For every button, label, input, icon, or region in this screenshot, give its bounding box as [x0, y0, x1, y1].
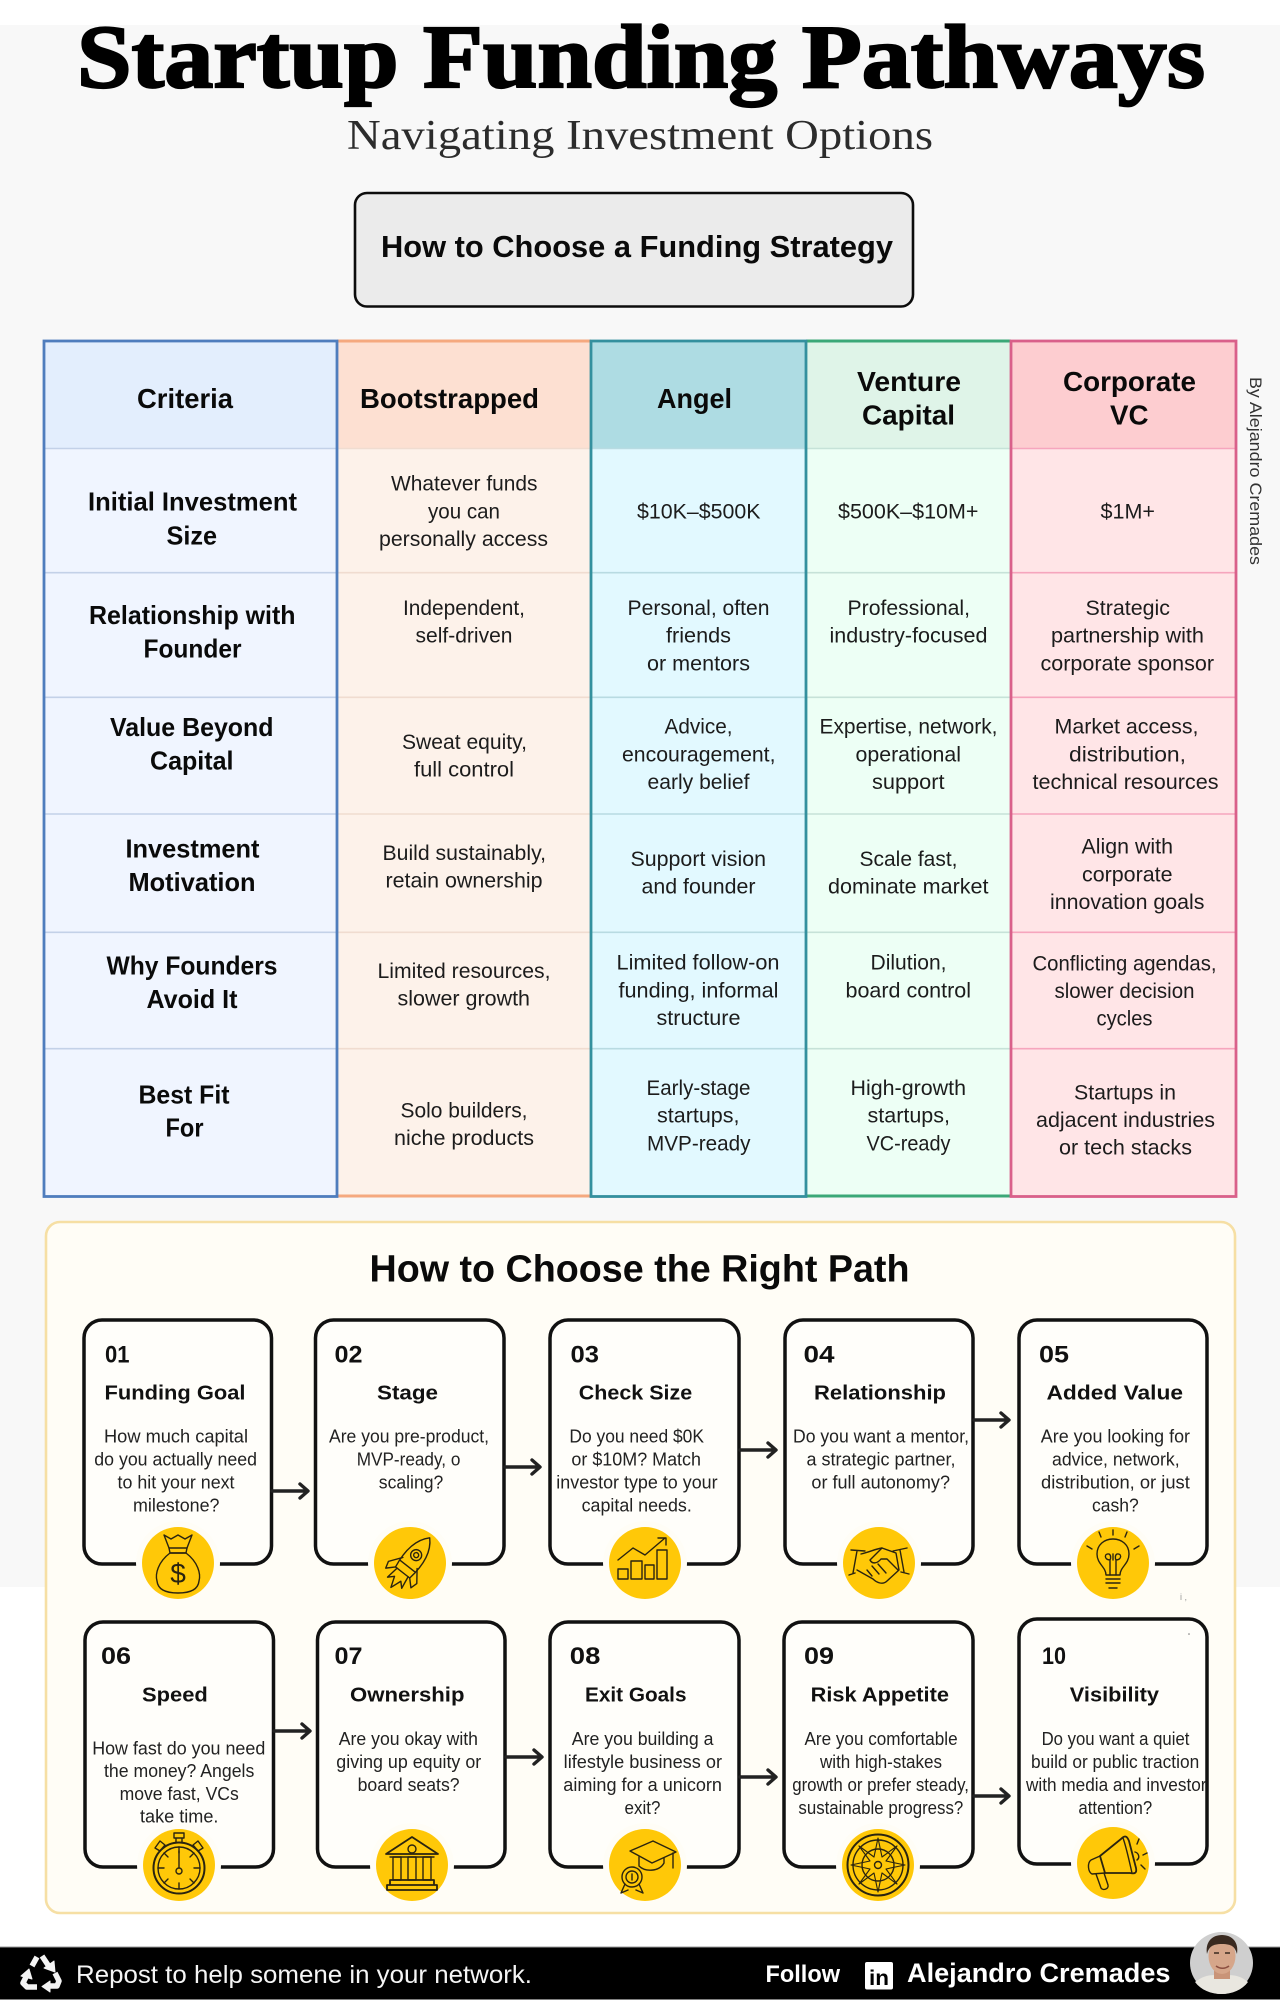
column: Venture Capital: Dilution,	[870, 952, 946, 975]
step 10: Visibility: build or public traction	[1031, 1752, 1199, 1772]
column: Bootstrapped: Whatever funds	[391, 473, 538, 496]
column: Venture Capital: dominate market	[828, 876, 989, 899]
icon: linkedin: in	[869, 1967, 889, 1990]
step 01: Funding Goal: do you actually need	[94, 1450, 257, 1470]
column: Bootstrapped: Solo builders,	[400, 1099, 528, 1122]
column: Criteria: Criteria	[137, 383, 233, 414]
column: Angel: Personal, often	[628, 597, 770, 620]
arrow 08 to 09	[740, 1770, 776, 1784]
column: Angel	[591, 340, 806, 1197]
step 02: Stage: scaling?	[379, 1472, 443, 1492]
column: Bootstrapped: Bootstrapped	[360, 383, 539, 414]
step 01: Funding Goal: Funding Goal	[104, 1381, 246, 1404]
column: Angel: Advice,	[664, 715, 732, 738]
column: Criteria: Size	[166, 521, 217, 551]
column: Bootstrapped	[337, 340, 591, 1197]
column: Venture Capital: $500K–$10M+	[838, 500, 978, 523]
column: Corporate VC: cycles	[1096, 1008, 1152, 1031]
step 10: Visibility: Visibility	[1070, 1684, 1160, 1707]
step 04: Relationship: 04	[804, 1342, 835, 1369]
subtitle: Navigating Investment Options	[347, 113, 933, 159]
step 03: Check Size	[550, 1320, 739, 1605]
column: Venture Capital: startups,	[868, 1105, 950, 1128]
step 06: Speed: 06	[101, 1643, 131, 1670]
column: Criteria: Initial Investment	[88, 487, 297, 517]
column: Bootstrapped: niche products	[394, 1127, 534, 1150]
step 01: Funding Goal: milestone?	[133, 1496, 220, 1516]
step 03: Check Size: Check Size	[579, 1381, 692, 1404]
icon: handshake	[843, 1527, 915, 1599]
column: Corporate VC: Market access,	[1054, 715, 1198, 738]
step 02: Stage: MVP-ready, o	[357, 1450, 460, 1470]
column: Corporate VC: partnership with	[1051, 625, 1204, 648]
step 09: Risk Appetite: Risk Appetite	[811, 1684, 949, 1707]
arrow 02 to 03	[505, 1460, 540, 1474]
heading box: How to Choose a Funding Strategy: How to Choose a Funding Strategy	[381, 229, 894, 264]
column: Corporate VC	[1011, 340, 1236, 1197]
column: Bootstrapped: self-driven	[416, 625, 512, 648]
column: Bootstrapped: Limited resources,	[378, 960, 550, 983]
step 09: Risk Appetite: growth or prefer steady,	[792, 1775, 969, 1795]
arrow 09 to 10	[974, 1789, 1009, 1803]
arrow 04 to 05	[974, 1413, 1009, 1427]
step 10: Visibility: with media and investor	[1025, 1775, 1206, 1795]
column: Venture Capital: operational	[856, 744, 961, 767]
icon: stopwatch	[143, 1829, 215, 1901]
column: Criteria	[44, 340, 337, 1197]
step 03: Check Size: 03	[570, 1342, 599, 1369]
step 07: Ownership: giving up equity or	[336, 1752, 481, 1772]
step 01: Funding Goal	[84, 1320, 272, 1605]
column: Criteria: Investment	[126, 834, 260, 864]
icon: linkedin	[865, 1962, 893, 1990]
footer message: Repost to help somene in your network.	[76, 1961, 532, 1989]
column: Corporate VC: $1M+	[1100, 500, 1155, 523]
step 04: Relationship: Relationship	[814, 1381, 946, 1404]
column: Angel: startups,	[657, 1105, 740, 1128]
step 03: Check Size: capital needs.	[582, 1496, 692, 1516]
column: Corporate VC: Startups in	[1074, 1081, 1176, 1104]
step 09: Risk Appetite: 09	[804, 1643, 834, 1670]
column: Criteria: Value Beyond	[110, 712, 274, 742]
column: Angel: funding, informal	[618, 979, 778, 1002]
column: Corporate VC: slower decision	[1054, 980, 1194, 1003]
arrow 06 to 07	[274, 1724, 310, 1738]
step 05: Added Value: cash?	[1092, 1496, 1139, 1516]
icon: money bag	[142, 1527, 214, 1599]
column: Angel: friends	[666, 625, 731, 648]
icon: bank building	[376, 1829, 448, 1901]
column: Criteria: For	[166, 1113, 204, 1143]
step 08: Exit Goals: lifestyle business or	[564, 1752, 722, 1772]
step 01: Funding Goal: to hit your next	[118, 1472, 234, 1492]
step 02: Stage: 02	[334, 1342, 362, 1369]
column: Bootstrapped: Sweat equity,	[402, 731, 527, 754]
step 08: Exit Goals: 08	[570, 1643, 600, 1670]
column: Angel: Angel	[657, 383, 732, 414]
heading box: How to Choose a Funding Strategy	[355, 193, 913, 306]
column: Venture Capital: VC-ready	[866, 1132, 951, 1155]
step 05: Added Value	[1019, 1320, 1207, 1605]
step 05: Added Value: distribution, or just	[1041, 1472, 1190, 1492]
column: Bootstrapped: slower growth	[398, 988, 530, 1011]
column: Bootstrapped: you can	[428, 500, 500, 524]
icon: light bulb	[1077, 1527, 1149, 1599]
step 05: Added Value: 05	[1039, 1342, 1069, 1369]
column: Corporate VC: Align with	[1082, 836, 1173, 859]
step 02: Stage: Are you pre-product,	[329, 1426, 489, 1446]
column: Corporate VC: Conflicting agendas,	[1032, 952, 1216, 975]
step 10: Visibility: attention?	[1078, 1798, 1152, 1818]
step 07: Ownership: Ownership	[350, 1684, 464, 1707]
column: Venture Capital: High-growth	[850, 1077, 966, 1100]
step 09: Risk Appetite: with high-stakes	[819, 1752, 942, 1772]
step 01: Funding Goal: How much capital	[104, 1426, 248, 1446]
column: Corporate VC: innovation goals	[1050, 891, 1204, 914]
column: Angel: and founder	[642, 876, 756, 899]
author credit: By Alejandro Cremades	[1246, 377, 1265, 565]
icon: recycle	[21, 1956, 59, 1992]
step 05: Added Value: Are you looking for	[1041, 1426, 1190, 1446]
column: Angel: encouragement,	[622, 744, 776, 767]
column: Criteria: Motivation	[128, 867, 256, 897]
step 07: Ownership: Are you okay with	[339, 1729, 478, 1749]
step 08: Exit Goals: aiming for a unicorn	[563, 1775, 722, 1795]
panel: How to Choose the Right Path	[46, 1222, 1235, 1913]
column: Venture Capital: Capital	[862, 400, 955, 430]
column: Bootstrapped: personally access	[379, 528, 548, 551]
icon: rocket	[359, 1512, 461, 1614]
title: Startup Funding Pathways	[77, 8, 1205, 107]
column: Angel: MVP-ready	[647, 1132, 751, 1155]
column: Criteria: Avoid It	[146, 984, 238, 1014]
icon: growth chart	[609, 1527, 681, 1599]
column: Angel: $10K–$500K	[637, 500, 760, 523]
step 09: Risk Appetite: Are you comfortable	[804, 1729, 958, 1749]
step 10: Visibility	[1019, 1619, 1207, 1905]
column: Angel: Limited follow-on	[616, 952, 780, 975]
stray marks: i ,	[1180, 1592, 1187, 1602]
step 06: Speed: How fast do you need	[92, 1738, 265, 1758]
column: Corporate VC: VC	[1110, 400, 1148, 430]
step 08: Exit Goals: Exit Goals	[585, 1684, 686, 1707]
column: Venture Capital: board control	[846, 979, 971, 1002]
step 07: Ownership: 07	[334, 1643, 362, 1670]
arrow 03 to 04	[740, 1443, 776, 1457]
step 03: Check Size: or $10M? Match	[571, 1450, 701, 1470]
author name: Alejandro Cremades	[907, 1958, 1170, 1988]
step 04: Relationship: a strategic partner,	[806, 1450, 956, 1470]
icon: money bag: $	[170, 1558, 186, 1589]
column: Criteria: Founder	[144, 633, 242, 663]
column: Bootstrapped: Independent,	[403, 597, 525, 620]
column: Criteria: Relationship with	[89, 600, 296, 630]
column: Venture Capital: Professional,	[848, 597, 970, 620]
icon: graduation cap and medal	[609, 1829, 681, 1901]
step 02: Stage: Stage	[377, 1381, 438, 1404]
step 09: Risk Appetite: sustainable progress?	[798, 1798, 963, 1818]
column: Corporate VC: Corporate	[1063, 366, 1196, 397]
column: Venture Capital: industry-focused	[830, 625, 988, 648]
column: Bootstrapped: retain ownership	[386, 870, 542, 893]
step 08: Exit Goals: exit?	[624, 1798, 660, 1818]
avatar portrait	[1190, 1932, 1253, 1994]
step 07: Ownership: board seats?	[358, 1775, 460, 1795]
column: Venture Capital: Scale fast,	[860, 848, 958, 871]
icon: compass	[842, 1829, 914, 1901]
column: Venture Capital	[806, 340, 1011, 1197]
column: Criteria: Best Fit	[138, 1079, 230, 1109]
column: Venture Capital: Expertise, network,	[820, 715, 998, 738]
step 06: Speed: move fast, VCs	[120, 1784, 239, 1804]
stray marks	[1180, 1592, 1190, 1635]
step 06: Speed: the money? Angels	[104, 1761, 254, 1781]
column: Corporate VC: distribution,	[1069, 744, 1186, 767]
column: Corporate VC: or tech stacks	[1059, 1137, 1192, 1160]
step 09: Risk Appetite	[784, 1622, 973, 1907]
icon: megaphone	[1077, 1827, 1149, 1899]
column: Corporate VC: corporate sponsor	[1040, 652, 1214, 675]
column: Corporate VC: technical resources	[1032, 771, 1218, 794]
step 05: Added Value: advice, network,	[1052, 1450, 1180, 1470]
step 07: Ownership	[318, 1622, 505, 1907]
step 01: Funding Goal: 01	[105, 1342, 130, 1369]
column: Corporate VC: adjacent industries	[1036, 1109, 1215, 1132]
column: Angel: structure	[656, 1007, 740, 1030]
step 04: Relationship: Do you want a mentor,	[793, 1426, 969, 1446]
step 10: Visibility: 10	[1042, 1643, 1066, 1670]
column: Angel: Early-stage	[646, 1077, 750, 1100]
step 06: Speed: Speed	[142, 1684, 208, 1707]
column: Criteria: Why Founders	[106, 950, 278, 980]
step 04: Relationship	[785, 1320, 973, 1605]
column: Angel: early belief	[648, 771, 750, 794]
column: Corporate VC: Strategic	[1086, 597, 1170, 620]
step 06: Speed: take time.	[140, 1807, 218, 1827]
step 03: Check Size: Do you need $0K	[569, 1426, 704, 1446]
arrow 01 to 02	[272, 1484, 308, 1498]
step 10: Visibility: Do you want a quiet	[1042, 1729, 1189, 1749]
column: Criteria: Capital	[150, 746, 234, 776]
step 03: Check Size: investor type to your	[556, 1472, 718, 1492]
step 04: Relationship: or full autonomy?	[811, 1472, 950, 1492]
footer bar	[0, 1932, 1280, 2000]
step 08: Exit Goals	[550, 1622, 739, 1907]
column: Bootstrapped: full control	[414, 758, 514, 781]
comparison table	[44, 340, 1236, 1197]
step 06: Speed	[85, 1622, 274, 1907]
column: Angel: Support vision	[630, 848, 766, 871]
column: Corporate VC: corporate	[1082, 864, 1172, 887]
column: Angel: or mentors	[647, 653, 750, 676]
step 05: Added Value: Added Value	[1046, 1381, 1183, 1404]
step 02: Stage	[316, 1320, 504, 1614]
follow label: Follow	[766, 1961, 840, 1988]
column: Venture Capital: support	[872, 771, 945, 794]
column: Venture Capital: Venture	[857, 366, 961, 397]
arrow 07 to 08	[506, 1750, 542, 1764]
panel heading: How to Choose the Right Path	[370, 1249, 910, 1291]
column: Bootstrapped: Build sustainably,	[382, 842, 546, 865]
step 08: Exit Goals: Are you building a	[572, 1729, 714, 1749]
